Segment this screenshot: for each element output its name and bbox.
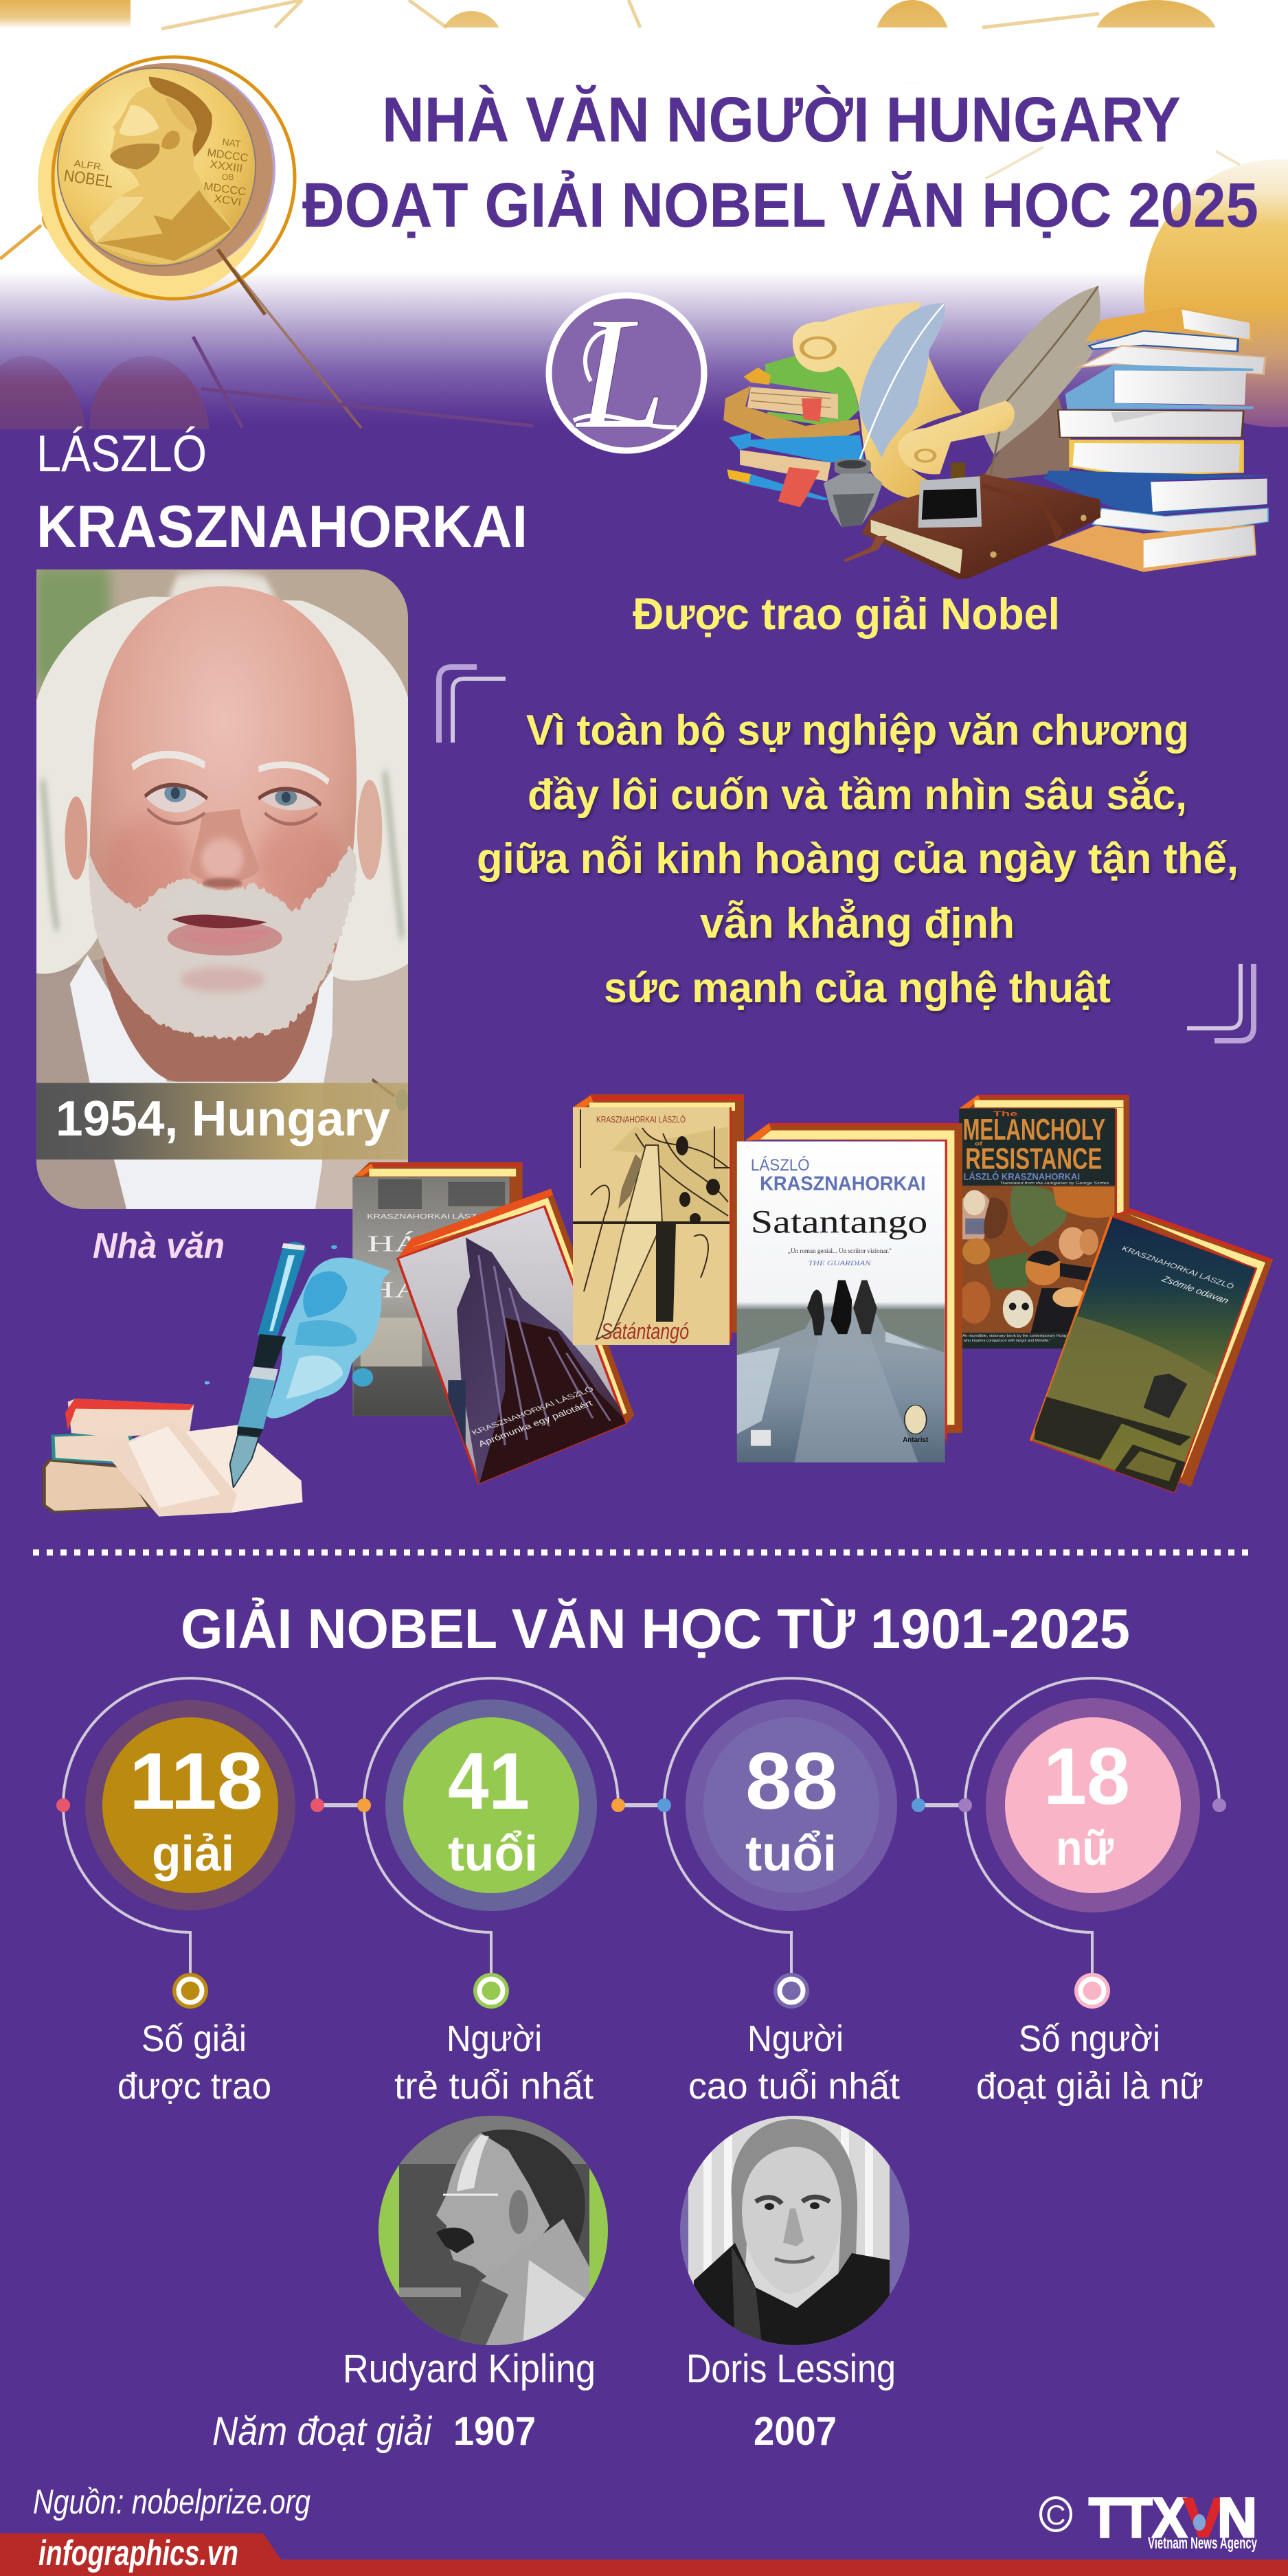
book: The Melancholy of Resistance: LÁSZLÓ KRASZNAHORKAI [964,1171,1080,1182]
Nobel medal: MDCCC [203,181,247,199]
footer bar: infographics.vn [38,2533,238,2573]
citation quote: sức mạnh của nghệ thuật [604,964,1111,1012]
book: Satantango: „Un roman genial... Un scriitor vizionar." [788,1248,892,1255]
connectors [317,1803,965,1807]
logo: TTXVN: V [1183,2487,1224,2549]
citation quote: vẫn khẳng định [700,899,1015,947]
book: Satantango: KRASZNAHORKAI [760,1173,926,1195]
book: Aprómunka egy palotáért [398,1188,634,1486]
stat: oldest 88: tuổi [745,1827,837,1882]
citation quote: đầy lôi cuốn và tầm nhìn sâu sắc, [528,771,1187,819]
open book [104,1421,303,1517]
Nobel medal: MDCCC [206,147,249,164]
stat: 18 women: đoạt giải là nữ [976,2066,1204,2107]
portrait: Doris Lessing [680,2109,909,2356]
book: The Melancholy of Resistance: "An incredible, visionary book by the contemporary Hungar [961,1334,1070,1338]
logo: TTXVN: C [1046,2500,1065,2531]
logo: TTXVN [1041,2487,1257,2553]
icon: L monogram [549,284,704,462]
stat: oldest 88: Người [747,2018,844,2059]
names: Rudyard Kipling [343,2347,596,2391]
scrolls [793,302,1015,499]
title: NHÀ VĂN NGƯỜI HUNGARY [382,84,1181,155]
citation quote: giữa nỗi kinh hoàng của ngày tận thế, [477,835,1239,883]
right stack of books [1043,307,1273,572]
book: The Melancholy of Resistance [958,1095,1129,1350]
portrait: László Krasznahorkai [35,563,409,1213]
quote brackets [439,667,1254,1041]
icon: blue feather [856,304,945,469]
book: The Melancholy of Resistance: Translated from the Hungarian by George Szirtes [1000,1182,1109,1186]
book: Satantango: Antarist [903,1436,928,1443]
icon: L monogram: L [575,284,666,462]
writer name: KRASZNAHORKAI [36,494,528,560]
names [343,2347,896,2391]
title [302,84,1258,240]
illustration: books, scrolls, feathers, ink [723,286,1273,579]
stat: youngest 41: Người [447,2018,542,2059]
icon: ink bottle [918,462,982,528]
stat: youngest 41 [357,1678,625,2107]
book: Aprómunka egy palotáért: KRASZNAHORKAI LÁSZLÓ [469,1385,596,1436]
portrait: Rudyard Kipling [379,2109,608,2356]
stat: oldest 88: 88 [745,1736,838,1826]
stat: youngest 41: 41 [448,1736,530,1826]
award years [212,2409,837,2454]
stacked books [44,1399,194,1512]
logo: TTXVN: TTX [1089,2487,1187,2549]
names: Doris Lessing [686,2347,896,2391]
book: Sátántangó: Sátántangó [601,1319,689,1344]
stat: 118 prizes: giải [152,1827,234,1882]
stat: oldest 88 [657,1678,925,2107]
Nobel medal: NOBEL [63,166,114,192]
award years: Năm đoạt giải [212,2409,433,2454]
icon: grey inkwell [824,459,883,527]
icon: fountain pen [230,1242,306,1488]
award years: 2007 [754,2409,837,2454]
Nobel medal: XCVI [213,193,242,209]
stat: oldest 88: cao tuổi nhất [688,2066,900,2107]
section heading: GIẢI NOBEL VĂN HỌC TỪ 1901-2025 [181,1598,1130,1660]
stat: 18 women [958,1678,1226,2107]
book: The Melancholy of Resistance: RESISTANCE [965,1142,1102,1176]
book: Háború és háború: HÁ [367,1230,422,1256]
award years: 1907 [453,2409,536,2454]
book: The Melancholy of Resistance: of [975,1141,983,1147]
caption: writer: Nhà văn [93,1226,225,1266]
book: Aprómunka egy palotáért: Aprómunka egy palotáért [475,1399,596,1449]
illustration: pen, ink splash, books [44,1242,391,1517]
left stack of books [723,355,864,507]
footer bar [0,2533,1288,2576]
dotted separator [33,1550,1253,1555]
writer name [36,425,528,560]
book: The Melancholy of Resistance: who inspires comparison with Gogol and Melville." [963,1339,1051,1342]
book: Sátántangó: KRASZNAHORKAI LÁSZLÓ [596,1114,686,1125]
book: The Melancholy of Resistance: MELANCHOLY [963,1113,1105,1146]
citation quote [477,707,1239,1012]
stat: 118 prizes [56,1678,324,2107]
book: Háború és háború: HÁ [367,1276,422,1302]
book: Zsömle odavan: KRASZNAHORKAI LÁSZLÓ [1120,1244,1236,1291]
icon: grey feather [978,286,1100,479]
heading: awarded: Được trao giải Nobel [633,589,1060,639]
stat: 118 prizes: được trao [117,2066,271,2107]
book: Háború és háború [352,1162,523,1416]
citation quote: Vì toàn bộ sự nghiệp văn chương [526,707,1189,754]
source: Nguồn: nobelprize.org [33,2483,310,2521]
book: Háború és háború: KRASZNAHORKAI LÁSZ [367,1212,477,1220]
icon: leather notebook [844,474,1100,579]
Nobel medal: OB [222,172,234,182]
Nobel medal: XXXIII [209,159,243,175]
book: Satantango: THE GUARDIAN [809,1260,871,1267]
stat: 18 women: nữ [1056,1821,1114,1876]
stat: youngest 41: tuổi [448,1827,538,1882]
book: Zsömle odavan [1031,1208,1273,1492]
stat: 118 prizes: Số giải [142,2018,247,2059]
Nobel medal: NAT [222,136,242,150]
book: Satantango: Satantango [751,1204,927,1241]
book: Sátántangó [573,1094,744,1345]
Nobel medal [38,57,295,315]
book: Satantango: LÁSZLÓ [751,1156,810,1175]
stat: youngest 41: trẻ tuổi nhất [394,2066,594,2107]
logo: TTXVN: N [1217,2487,1257,2549]
book: The Melancholy of Resistance: The [993,1109,1018,1118]
book: Satantango [737,1123,962,1462]
birth year and country: 1954, Hungary [56,1092,390,1146]
book: Zsömle odavan: Zsömle odavan [1159,1274,1230,1306]
writer name: LÁSZLÓ [36,425,207,482]
ink splash [205,1245,391,1419]
stat: 18 women: 18 [1043,1731,1130,1821]
Nobel medal: ALFR. [74,157,104,172]
stat: 18 women: Số người [1019,2018,1160,2059]
stat: 118 prizes: 118 [129,1736,263,1826]
